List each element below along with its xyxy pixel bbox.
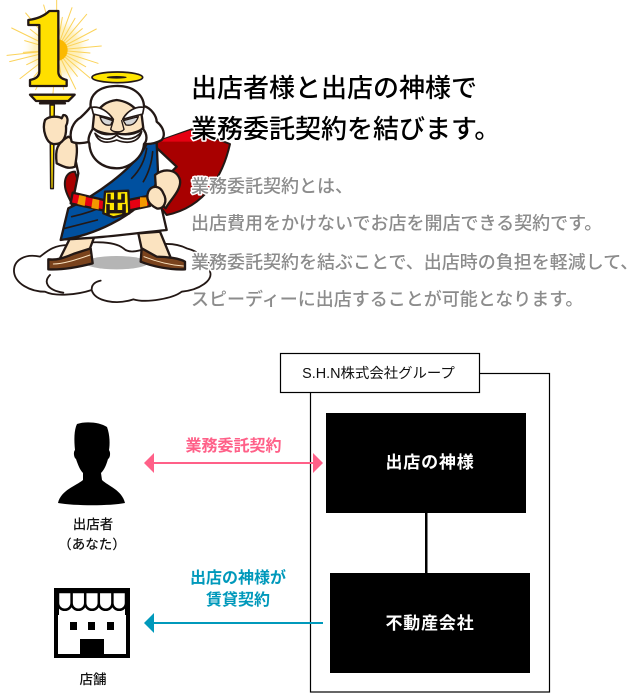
belt <box>71 193 150 211</box>
shadow under feet <box>85 256 148 269</box>
label: 出店者（あなた）: （あなた） <box>58 537 126 552</box>
connector line <box>425 513 428 573</box>
body text: 出店費用をかけないでお店を開店できる契約です。 <box>191 214 602 234</box>
moustache <box>95 132 142 142</box>
label: 出店者（あなた）: 出店者 <box>73 517 113 532</box>
windows and door <box>70 622 114 655</box>
beard <box>89 128 146 168</box>
icon: cloud <box>14 242 211 302</box>
icon: sun rays <box>7 0 101 93</box>
heading: 出店者様と出店の神様で <box>191 73 477 103</box>
eyebrows <box>92 107 144 119</box>
right fist <box>147 187 165 209</box>
heading <box>191 73 500 144</box>
halo centre <box>107 76 127 79</box>
cape <box>65 129 230 215</box>
mascot: god of store opening holding number one <box>7 0 230 302</box>
box: 出店の神様 <box>326 413 526 513</box>
label: 出店の神様が賃貸契約: 賃貸契約 <box>206 590 270 609</box>
box: 出店の神様: 出店の神様 <box>386 453 474 472</box>
arrow: blue <box>144 613 323 633</box>
box: 不動産会社: 不動産会社 <box>386 614 474 633</box>
tunic <box>63 140 177 239</box>
halo <box>92 72 143 83</box>
sandals <box>48 248 185 269</box>
box: 不動産会社 <box>330 573 530 673</box>
body text: 業務委託契約を結ぶことで、出店時の負担を軽減して、 <box>191 252 633 272</box>
label: 出店者（あなた） <box>58 517 126 552</box>
awning sides <box>54 592 130 615</box>
left hand <box>44 115 68 144</box>
body text <box>191 176 633 310</box>
label: 業務委託契約: 業務委託契約 <box>185 436 282 455</box>
icon: store <box>54 588 130 658</box>
arrow: pink double <box>144 453 323 473</box>
heading: 業務委託契約を結びます。 <box>191 114 500 144</box>
label: 出店の神様が賃貸契約 <box>190 568 286 609</box>
sandal straps <box>53 255 183 266</box>
legs <box>58 232 172 262</box>
belt buckle <box>103 191 129 217</box>
right arm <box>155 170 180 208</box>
blue sash <box>61 143 158 240</box>
awning <box>58 592 126 610</box>
body text: 業務委託契約とは、 <box>191 176 353 196</box>
body text: スピーディーに出店することが可能となります。 <box>191 288 583 310</box>
scepter staff <box>50 105 54 189</box>
group outer frame <box>310 374 550 692</box>
number one <box>28 11 67 86</box>
hair <box>71 86 164 144</box>
group label box: S.H.N株式会社グループ <box>302 365 455 382</box>
scepter head <box>30 95 75 103</box>
left arm <box>56 137 77 168</box>
face <box>93 100 143 135</box>
icon: person silhouette <box>58 422 125 505</box>
god body <box>30 72 185 269</box>
sash folds <box>65 148 153 228</box>
eyes <box>100 117 138 125</box>
label: 店舗: 店舗 <box>80 672 106 687</box>
nose <box>111 121 124 132</box>
label: 出店の神様が賃貸契約: 出店の神様が <box>190 568 286 587</box>
belt stripes <box>77 195 147 209</box>
group label box <box>280 354 480 392</box>
belt kanji: 出 <box>104 191 128 218</box>
